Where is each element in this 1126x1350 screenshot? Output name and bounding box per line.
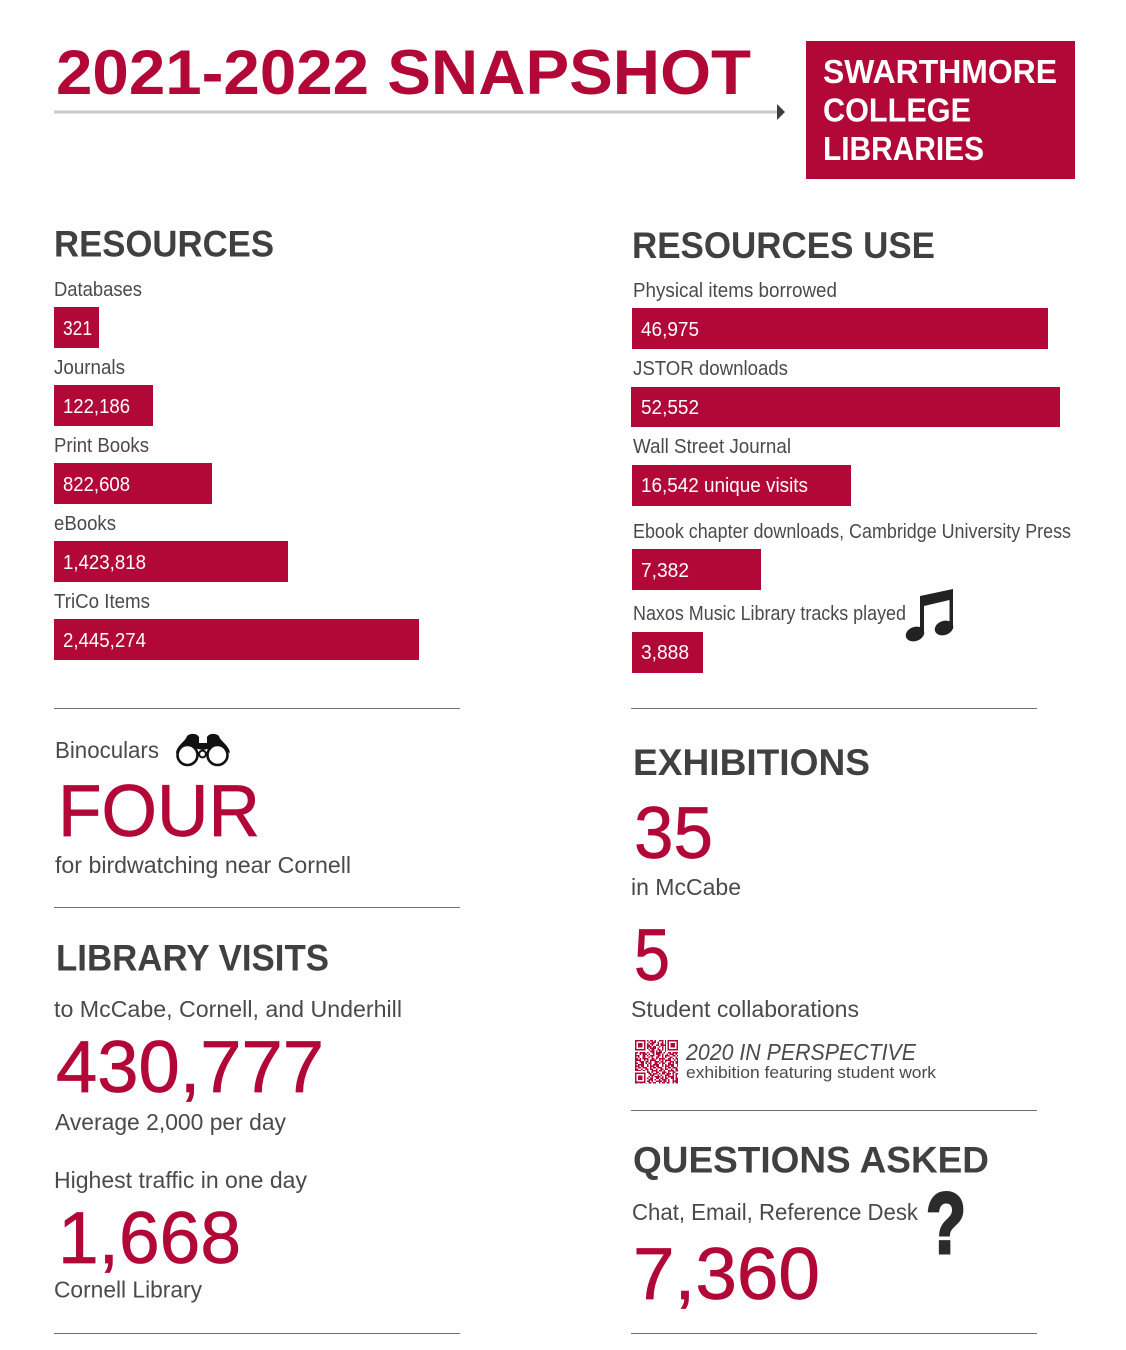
big number: 35: 35	[634, 791, 713, 874]
panel: binoculars: Binoculars	[55, 737, 159, 763]
heading: questions asked: QUESTIONS ASKED	[633, 1138, 989, 1180]
panel: exhibitions: Student collaborations	[631, 996, 859, 1022]
panel: binoculars	[55, 734, 351, 878]
big number: 5: 5	[634, 913, 670, 996]
panel: questions asked	[632, 1138, 989, 1315]
heading: resources: RESOURCES	[54, 222, 274, 264]
bar: jstor downloads: JSTOR downloads	[633, 358, 788, 380]
bar: jstor downloads: 52,552	[641, 397, 699, 419]
text: 2020 in perspective: 2020 IN PERSPECTIVE	[685, 1039, 917, 1065]
icon: binoculars	[176, 734, 230, 765]
bar: ebooks: 1,423,818	[63, 552, 146, 574]
panel: library visits: Highest traffic in one day	[54, 1167, 307, 1193]
panel: library visits: Average 2,000 per day	[55, 1109, 286, 1135]
icon: qr code	[635, 1040, 678, 1083]
big number: total visits: 430,777	[56, 1025, 324, 1108]
bar: ebooks: eBooks	[54, 513, 116, 535]
panel: exhibitions: in McCabe	[631, 874, 741, 900]
bar: ebook chapter downloads	[632, 521, 1071, 590]
arrow: title underline	[54, 104, 785, 120]
heading: exhibitions: EXHIBITIONS	[633, 741, 870, 783]
panel: resources use	[631, 224, 1071, 673]
bar: trico items: 2,445,274	[63, 630, 146, 652]
bar: databases	[54, 279, 142, 348]
icon: question mark: ?	[926, 1176, 966, 1272]
bar: ebooks	[54, 513, 288, 582]
bar: trico items	[54, 591, 419, 660]
panel: exhibitions	[631, 741, 937, 1083]
big number: four: FOUR	[58, 769, 260, 852]
bar: journals: 122,186	[63, 396, 130, 418]
heading: resources use: RESOURCES USE	[632, 224, 935, 266]
badge: Swarthmore College Libraries: COLLEGE	[823, 92, 971, 130]
panel: resources	[54, 222, 419, 660]
badge: Swarthmore College Libraries	[806, 41, 1075, 179]
bar: wall street journal: 16,542 unique visits	[641, 475, 808, 497]
bar: jstor downloads	[631, 358, 1060, 427]
bar: journals	[54, 357, 153, 426]
bar: print books: Print Books	[54, 435, 149, 457]
bar: print books: 822,608	[63, 474, 130, 496]
bar: databases: Databases	[54, 279, 142, 301]
panel: questions asked: Chat, Email, Reference Desk	[632, 1199, 918, 1225]
panel: library visits	[54, 936, 402, 1302]
badge: Swarthmore College Libraries: SWARTHMORE	[823, 54, 1057, 91]
bar: naxos music library: 3,888	[641, 642, 689, 664]
bar: physical items borrowed: Physical items borrowed	[633, 280, 837, 302]
bar: physical items borrowed	[632, 280, 1048, 349]
bar: print books	[54, 435, 212, 504]
bar: ebook chapter downloads: Ebook chapter downloads, Cambridge University Press	[633, 521, 1071, 543]
bar: wall street journal	[632, 436, 851, 506]
text: 2020 in perspective	[685, 1039, 937, 1082]
heading: library visits: LIBRARY VISITS	[56, 936, 329, 978]
panel: binoculars: for birdwatching near Cornell	[55, 852, 351, 878]
badge: Swarthmore College Libraries: LIBRARIES	[823, 131, 984, 168]
title: 2021-2022 SNAPSHOT	[56, 38, 751, 108]
bar: trico items: TriCo Items	[54, 591, 150, 613]
big number: questions: 7,360	[633, 1232, 820, 1315]
panel: library visits: to McCabe, Cornell, and Underhill	[54, 996, 402, 1022]
bar: wall street journal: Wall Street Journal	[633, 436, 791, 458]
bar: ebook chapter downloads: 7,382	[641, 560, 689, 582]
icon: music notes	[904, 589, 955, 644]
bar: naxos music library	[632, 603, 906, 673]
text: 2020 in perspective: exhibition featuring student work	[686, 1063, 937, 1082]
big number: highest traffic: 1,668	[58, 1196, 241, 1279]
bar: databases: 321	[63, 318, 92, 340]
bar: naxos music library: Naxos Music Library tracks played	[633, 603, 906, 625]
bar: physical items borrowed: 46,975	[641, 319, 699, 341]
bar: journals: Journals	[54, 357, 125, 379]
panel: library visits: Cornell Library	[54, 1276, 202, 1302]
